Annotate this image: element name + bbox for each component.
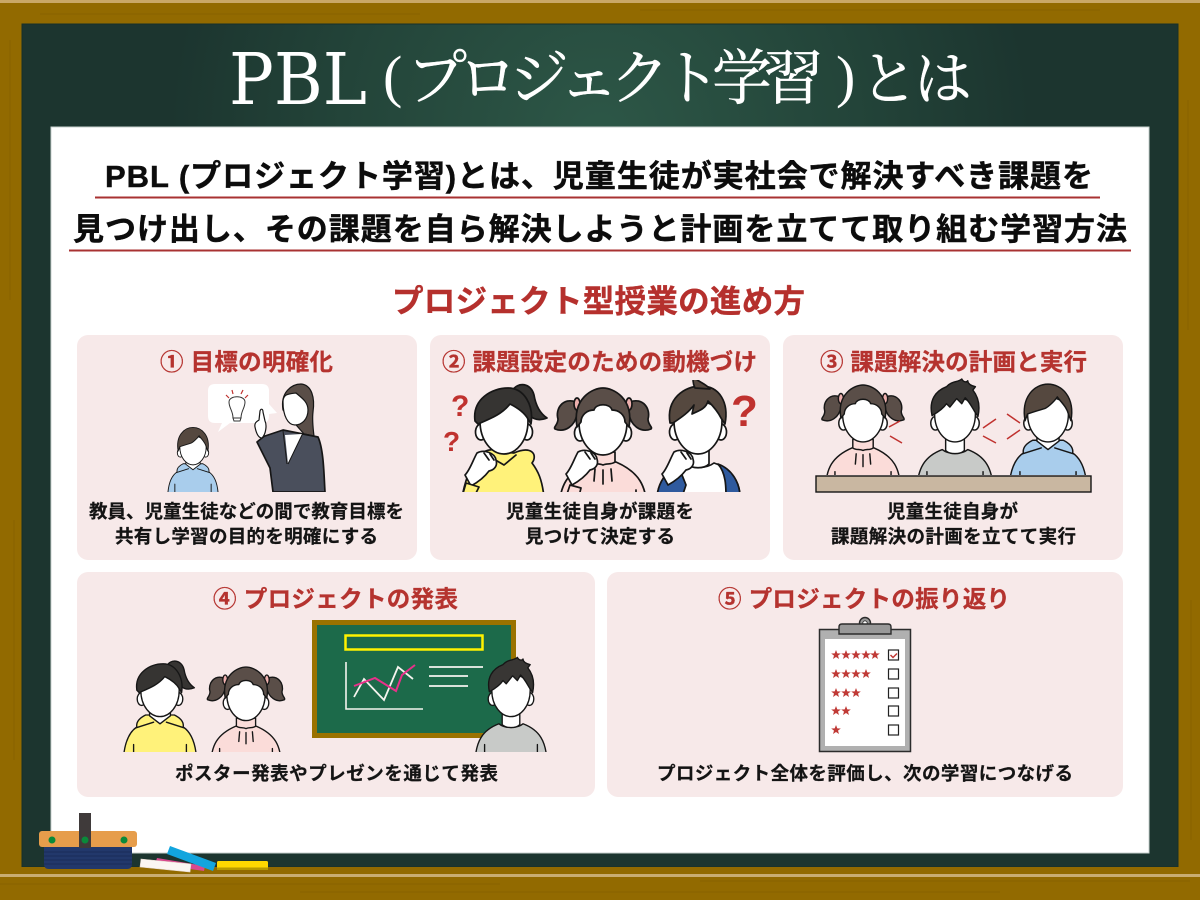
step 1 description (89, 501, 404, 547)
panel: step 3 (783, 335, 1123, 560)
title (229, 38, 972, 121)
panel: step 5 (607, 572, 1123, 797)
step 3 description: 児童生徒自身が (887, 501, 1018, 522)
illustration: student and teacher with idea bubble (168, 384, 325, 496)
icon: eraser (39, 813, 137, 869)
section heading: プロジェクト型授業の進め方 (392, 283, 805, 319)
step 2 description: 見つけて決定する (525, 526, 675, 547)
illustration: presentation board (314, 622, 514, 736)
step 5 description: プロジェクト全体を評価し、次の学習につなげる (657, 763, 1073, 784)
illustration: three thinking children with question marks: ? (731, 387, 758, 436)
step 4 description: ポスター発表やプレゼンを通じて発表 (175, 763, 498, 784)
panel: step 1 (77, 335, 417, 560)
definition statement: 見つけ出し、その課題を自ら解決しようと計画を立てて取り組む学習方法 (73, 212, 1127, 247)
icon: evaluation clipboard (820, 618, 910, 752)
title: プロジェクト学習 (407, 44, 823, 114)
title: とは (860, 45, 972, 113)
illustration: three thinking children with question marks: ? (443, 426, 460, 457)
title: ) (836, 44, 855, 109)
step 3 description: 課題解決の計画を立てて実行 (831, 526, 1076, 547)
title: PBL (229, 38, 367, 121)
step 2 description (506, 501, 694, 547)
step 2 description: 児童生徒自身が課題を (506, 501, 694, 522)
illustration: three children talking at a desk (816, 379, 1091, 492)
panel: step 2 (430, 335, 770, 560)
illustration: three thinking children with question marks: ? (451, 390, 469, 423)
white content panel (51, 127, 1149, 853)
step 2 heading: ② 課題設定のための動機づけ (442, 349, 757, 375)
title: ( (383, 44, 402, 109)
icon: chalk pieces (140, 846, 268, 872)
step 1 heading: ① 目標の明確化 (160, 349, 333, 375)
step 3 heading: ③ 課題解決の計画と実行 (820, 349, 1087, 375)
step 1 description: 共有し学習の目的を明確にする (115, 526, 378, 547)
illustration: three thinking children with question marks (444, 380, 756, 492)
step 4 heading: ④ プロジェクトの発表 (213, 586, 458, 612)
panel: step 4 (77, 572, 595, 797)
illustration: presenting children (123, 656, 547, 752)
definition statement (69, 159, 1131, 250)
definition statement: PBL (プロジェクト学習)とは、児童生徒が実社会で解決すべき課題を (105, 159, 1093, 194)
step 3 description (831, 501, 1076, 547)
chalk ledge (0, 867, 1200, 900)
step 1 description: 教員、児童生徒などの間で教育目標を (89, 501, 404, 522)
step 5 heading: ⑤ プロジェクトの振り返り (718, 586, 1010, 612)
